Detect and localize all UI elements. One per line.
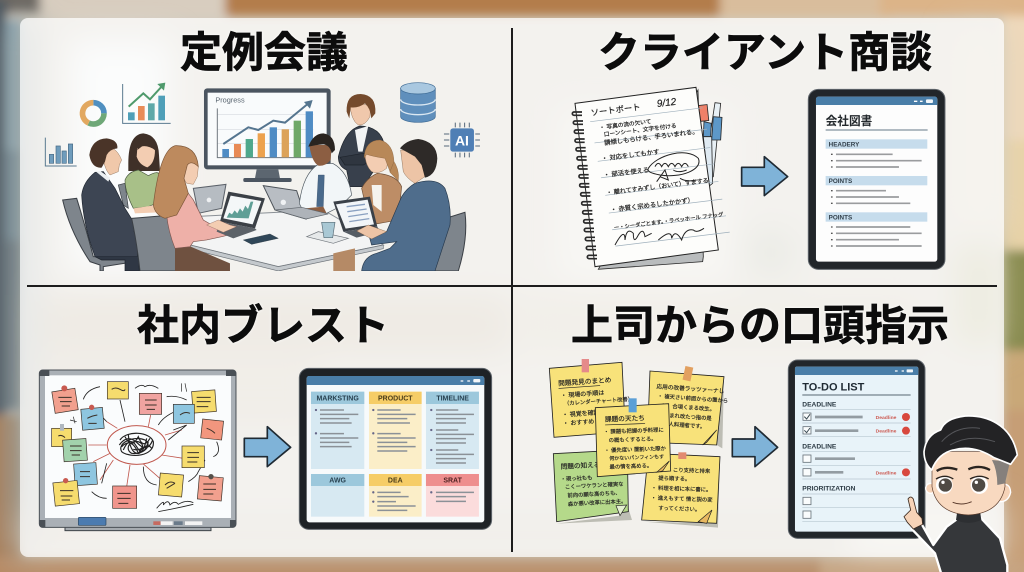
column: MARKSTING: MARKSTING bbox=[316, 395, 359, 402]
arrow bbox=[742, 157, 788, 196]
panel: 定例会議 meeting illustration bbox=[45, 83, 480, 272]
sticky note pins and scribbles bbox=[58, 385, 216, 503]
notebook text bbox=[588, 92, 730, 247]
presenter hair highlights bbox=[942, 428, 995, 445]
notebook text: ・ 部活を使える bbox=[603, 165, 650, 179]
trio on the right bbox=[263, 133, 466, 271]
monitor with progress chart bbox=[204, 88, 331, 182]
sticky note: green, bottom left: 森か悪い改革に出本主。 bbox=[568, 497, 627, 508]
person: woman in pink with long hair bbox=[153, 146, 237, 272]
notebook spiral bbox=[572, 112, 597, 259]
presenter hair bbox=[924, 416, 1017, 470]
icon: AI chip bbox=[444, 123, 480, 157]
notebook text: ・ 離れてすみずし（おいて）すまする bbox=[606, 176, 709, 197]
person: dark-skinned man, white shirt bbox=[275, 133, 352, 219]
sticky note: yellow, top right: 主まれ改たつ指の是 bbox=[664, 411, 713, 422]
notebook text: ・ 対応をしてもかす bbox=[601, 147, 660, 163]
sticky note: green, bottom left: 前向の願な高のちも、 bbox=[567, 489, 621, 499]
chair, right bbox=[435, 212, 466, 271]
notebook text: 請傾しもらける、手ろいまれる。 bbox=[604, 127, 699, 147]
sticky note: yellow, centre: ・ 優先度い 置割いた際か bbox=[604, 444, 667, 454]
phone bbox=[243, 234, 278, 244]
icon: growth chart bbox=[123, 83, 171, 123]
icon: database bbox=[401, 83, 435, 122]
presenter collar bbox=[956, 511, 981, 523]
icon: donut chart bbox=[83, 103, 104, 124]
notebook text: 9/12 bbox=[656, 97, 677, 110]
arrow bbox=[244, 427, 291, 467]
silver laptop bbox=[263, 186, 306, 219]
notebook sketches and signatures bbox=[615, 153, 704, 245]
sticky note: green, bottom left: こくーワケランと確実な bbox=[565, 480, 624, 491]
panel: 上司からの口頭指示 sticky notes to to-do list bbox=[549, 359, 925, 538]
presenter face bbox=[932, 452, 1005, 515]
central scribble and connectors bbox=[70, 383, 219, 512]
tablet: to-do list bbox=[788, 360, 925, 538]
sticky note: yellow, bottom right: ・ 料理を相に本に書に。 bbox=[651, 484, 712, 494]
tablet: company document: POINTS bbox=[829, 178, 852, 185]
sticky note: yellow, centre: 最の情を高める。 bbox=[609, 461, 652, 471]
column: PRODUCT: PRODUCT bbox=[378, 395, 413, 402]
column: DEA bbox=[369, 474, 422, 517]
glass and notepad bbox=[307, 222, 348, 243]
column: TIMELINE: TIMELINE bbox=[436, 395, 469, 402]
sticky note: yellow, top right: ・ 複天さい前面からの置から bbox=[657, 392, 728, 405]
column: AWG: AWG bbox=[329, 478, 346, 485]
sticky note: yellow, top left: 問題発見のまとめ bbox=[558, 375, 612, 388]
tablet: to-do list: Deadline bbox=[876, 415, 897, 421]
sticky note: yellow, bottom right: ・ 進えもすて 情と説の変 bbox=[651, 494, 713, 504]
sticky note: yellow, centre: ・ 課題も把握の手料理に bbox=[604, 426, 664, 436]
sticky note: yellow, top left: （カレンダーチャート改善） bbox=[564, 395, 633, 407]
sticky note: yellow, top right: 応用の改善ラッツァーナし bbox=[656, 382, 725, 395]
sticky note: yellow, top right: に、合項くまる改生。 bbox=[662, 401, 715, 413]
tablet: company document: 会社図書 bbox=[826, 114, 873, 128]
tablet: category board bbox=[299, 368, 492, 529]
sticky note: yellow, top left bbox=[549, 359, 635, 437]
screen laptop bbox=[333, 197, 380, 238]
heading: 社内ブレスト: 社内ブレスト bbox=[137, 302, 389, 349]
column: MARKSTING bbox=[311, 392, 364, 469]
column: TIMELINE bbox=[426, 392, 479, 469]
tablet: company document bbox=[808, 89, 945, 269]
tablet: to-do list: PRIORITIZATION bbox=[802, 486, 856, 493]
notebook text: 口ーンシート、文字を付ける bbox=[603, 122, 677, 138]
heading: 上司からの口頭指示: 上司からの口頭指示 bbox=[571, 302, 949, 349]
notebook text: ソートボート bbox=[590, 102, 641, 118]
sticky note: green, bottom left bbox=[553, 450, 632, 524]
sticky note: yellow, centre: 課題の天たち bbox=[605, 414, 645, 424]
heading: クライアント商談: クライアント商談 bbox=[598, 29, 932, 76]
icon: AI chip: AI bbox=[455, 132, 469, 148]
character: presenter pointing at tablet bbox=[904, 416, 1017, 572]
tablet: to-do list: DEADLINE bbox=[802, 444, 837, 451]
horizontal divider bbox=[27, 285, 997, 287]
panel: 社内ブレスト whiteboard to tablet bbox=[39, 368, 492, 531]
sticky notes bbox=[52, 382, 224, 508]
sticky note: yellow, centre: の概もくするとる。 bbox=[609, 434, 657, 444]
person: green sweater bbox=[118, 133, 160, 213]
vertical divider bbox=[511, 28, 513, 552]
sticky note: yellow, top right bbox=[647, 366, 729, 448]
sticky note: green, bottom left: 問題の知える bbox=[560, 460, 600, 471]
person: dark suit, left bbox=[82, 138, 139, 271]
open laptop with chart bbox=[207, 192, 265, 238]
column: AWG bbox=[311, 474, 364, 517]
presenter right ear bbox=[999, 484, 1011, 502]
sticky note: yellow, centre: 何かないパンフィンもす bbox=[609, 453, 664, 462]
back laptop bbox=[193, 184, 226, 213]
tablet: to-do list: TO-DO LIST bbox=[802, 381, 865, 393]
presenter hand bbox=[904, 497, 923, 529]
sticky note: yellow, bottom right: すってください。 bbox=[658, 505, 700, 513]
tablet: to-do list: Deadline bbox=[876, 470, 897, 476]
icon: small bar chart bbox=[45, 138, 77, 166]
sticky note: yellow, top right: 正人料理者です。 bbox=[663, 420, 706, 430]
tablet: to-do list: DEADLINE bbox=[802, 402, 837, 409]
column: PRODUCT bbox=[369, 392, 422, 469]
notebook text: ・ 赤質く宗めるしたかかず） bbox=[610, 195, 694, 214]
column: SRAT bbox=[426, 474, 479, 517]
monitor with progress chart: Progress bbox=[215, 96, 245, 105]
presenter side fade bbox=[992, 460, 1010, 485]
left chair bbox=[62, 198, 125, 271]
sticky note: yellow, centre bbox=[595, 398, 671, 477]
notebook bbox=[572, 87, 730, 269]
sticky note: yellow, top left: ・ 視覚を確認 bbox=[562, 408, 600, 419]
arrow bbox=[732, 427, 778, 467]
trio on the left bbox=[63, 133, 278, 272]
whiteboard bbox=[39, 370, 236, 531]
person: woman in tan blazer bbox=[333, 140, 402, 271]
person: standing in suit bbox=[338, 94, 384, 187]
tablet: to-do list: Deadline bbox=[876, 429, 897, 435]
table bbox=[190, 210, 383, 267]
column: SRAT: SRAT bbox=[443, 478, 463, 485]
sticky note: yellow, bottom right: こり支持と持来 bbox=[673, 466, 711, 475]
tablet: company document: HEADERY bbox=[829, 141, 860, 148]
notebook text: ・ 写真の流の欠いて bbox=[599, 117, 652, 132]
panel: クライアント商談 notebook to tablet bbox=[572, 87, 945, 269]
chair, front left bbox=[132, 216, 177, 271]
notebook text: ー・シーダごとます。・ラベッホール フナッグ bbox=[613, 210, 724, 232]
icon: pens bbox=[698, 103, 722, 187]
sticky note: green, bottom left: ・現っ社もも bbox=[560, 473, 593, 483]
person: blue suit, right bbox=[357, 139, 450, 271]
sticky note: yellow, bottom right bbox=[642, 452, 720, 528]
sticky note: yellow, bottom right: 提ら順する。 bbox=[658, 474, 690, 483]
heading: 定例会議: 定例会議 bbox=[180, 29, 348, 76]
sticky note: yellow, top left: ・ 現場の手順は bbox=[560, 389, 604, 400]
presenter eyes bbox=[936, 467, 990, 504]
presenter body bbox=[912, 518, 1007, 572]
presenter left ear bbox=[926, 483, 936, 493]
column: DEA: DEA bbox=[388, 478, 403, 485]
tablet: company document: POINTS bbox=[829, 214, 852, 221]
sticky note: yellow, top left: ・ おすすめ bbox=[562, 418, 594, 428]
meeting group bbox=[63, 94, 466, 272]
